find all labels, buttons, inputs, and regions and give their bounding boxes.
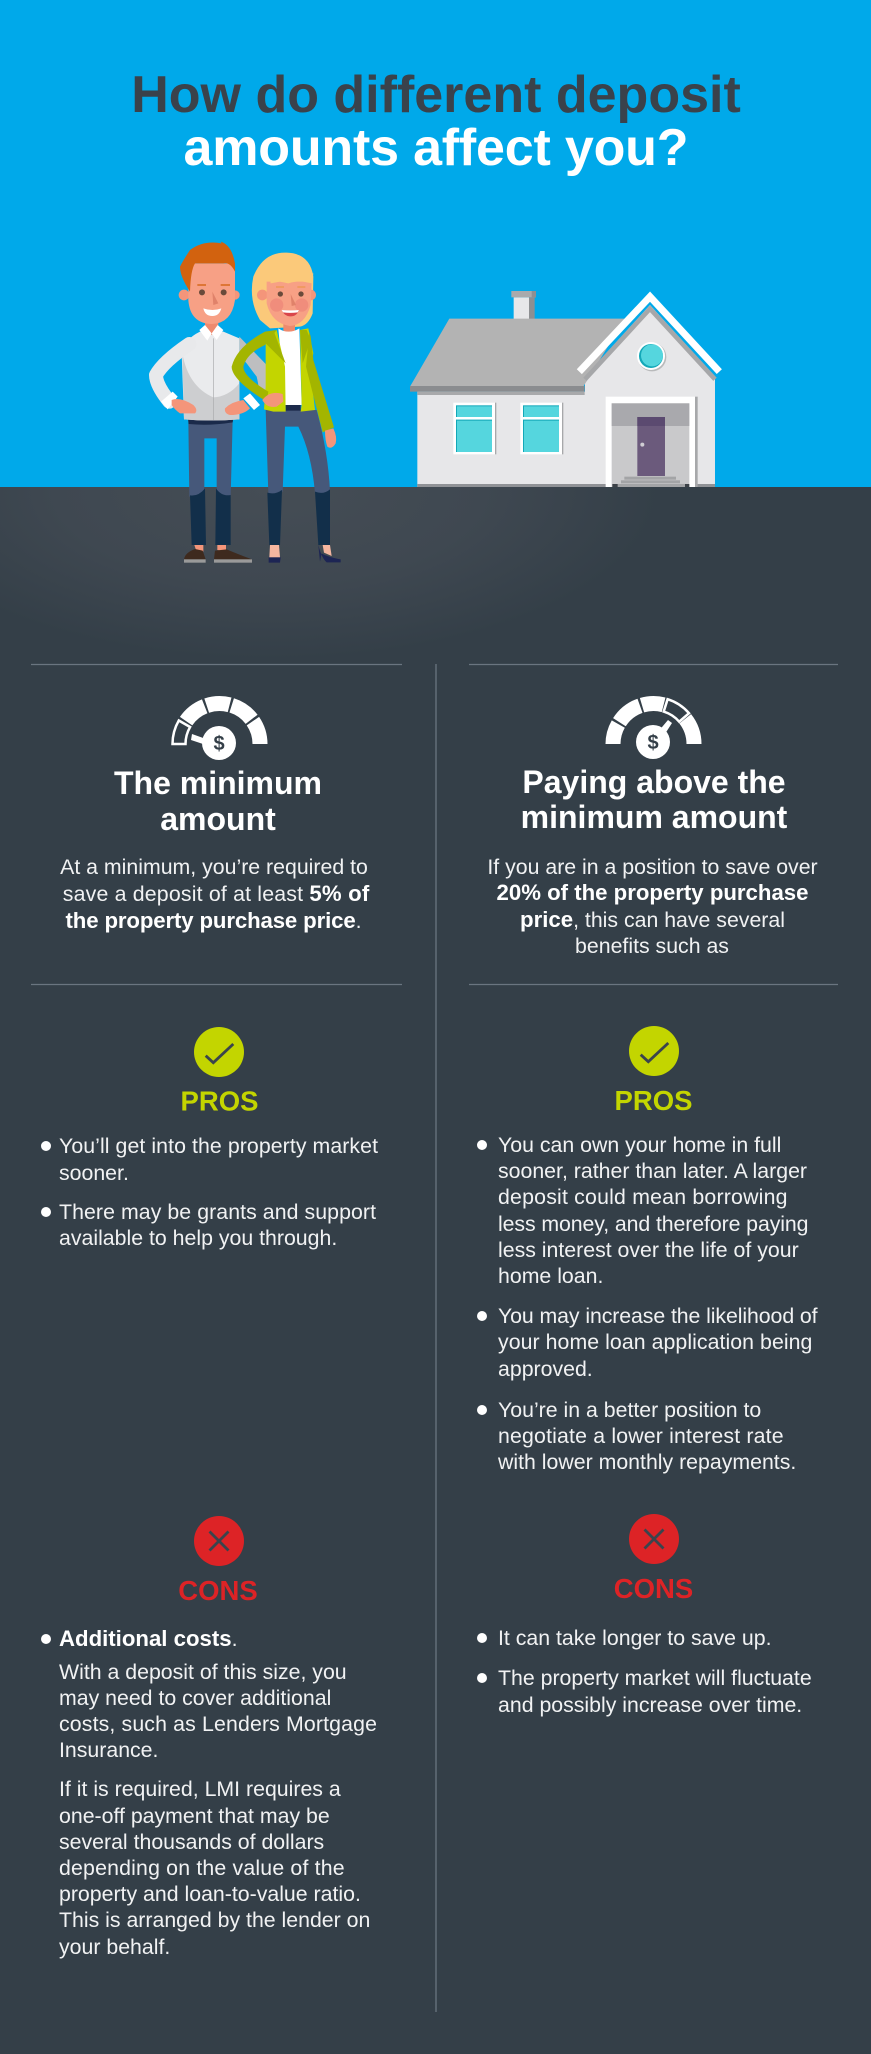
heading: The minimum (114, 765, 322, 801)
icon: pros tick (629, 1026, 679, 1076)
list: pros (477, 1133, 818, 1474)
text: intro: benefits such as (575, 934, 729, 958)
list: pros: You may increase the likelihood of (498, 1304, 818, 1328)
list: pros (41, 1134, 378, 1250)
heading (521, 764, 788, 835)
heading: Paying above the (522, 764, 786, 800)
text: intro: save a deposit of at least 5% of (63, 881, 370, 906)
icon: cons cross (629, 1514, 679, 1564)
text: intro: If you are in a position to save over (487, 855, 818, 879)
heading: amount (160, 801, 276, 837)
list: cons: It can take longer to save up. (498, 1626, 771, 1650)
list: cons: This is arranged by the lender on (59, 1908, 370, 1932)
heading: minimum amount (521, 799, 788, 835)
list: cons: may need to cover additional (59, 1686, 331, 1710)
list: pros: deposit could mean borrowing (498, 1185, 788, 1209)
list: pros: less interest over the life of your (498, 1238, 799, 1262)
list: cons: one-off payment that may be (59, 1804, 330, 1828)
list: pros: less money, and therefore paying (498, 1212, 808, 1236)
list: cons: The property market will fluctuate (498, 1666, 812, 1690)
list: pros: You can own your home in full (498, 1133, 781, 1157)
list: pros: sooner, rather than later. A larger (498, 1159, 807, 1183)
illustration: house (410, 291, 719, 487)
background: ground (0, 487, 871, 2054)
heading: cons: CONS (614, 1573, 693, 1604)
icon: gauge high: $ (647, 732, 659, 754)
list: cons: costs, such as Lenders Mortgage (59, 1712, 377, 1736)
text: intro: price, this can have several (520, 907, 785, 932)
list: pros: available to help you through. (59, 1226, 337, 1250)
dividers (31, 664, 838, 2012)
man (156, 242, 272, 563)
title (131, 66, 741, 177)
title: How do different deposit (131, 66, 741, 124)
icon: pros tick (194, 1027, 244, 1077)
panel: the minimum amount (41, 704, 378, 1959)
list: cons: your behalf. (59, 1935, 170, 1959)
list: cons: With a deposit of this size, you (59, 1660, 347, 1684)
list: cons: Additional costs. (59, 1626, 238, 1651)
list: cons: Insurance. (59, 1738, 158, 1762)
text: intro: the property purchase price. (66, 908, 362, 933)
woman (232, 253, 341, 563)
icon: cons cross (194, 1516, 244, 1566)
text: intro (60, 855, 370, 933)
text: intro (487, 855, 818, 958)
list: cons: depending on the value of the (59, 1856, 345, 1880)
list: pros: You’re in a better position to (498, 1398, 761, 1422)
heading: pros: PROS (615, 1085, 692, 1116)
heading: cons: CONS (178, 1575, 258, 1606)
list: cons: property and loan-to-value ratio. (59, 1882, 361, 1906)
text: intro: At a minimum, you’re required to (60, 855, 368, 879)
list: cons (477, 1626, 812, 1717)
text: intro: 20% of the property purchase (497, 880, 808, 905)
list: pros: your home loan application being (498, 1330, 812, 1354)
list: pros: negotiate a lower interest rate (498, 1424, 784, 1448)
heading: pros: PROS (181, 1086, 258, 1116)
list: pros: home loan. (498, 1264, 603, 1288)
background: sky (0, 0, 871, 488)
list: cons (41, 1626, 377, 1959)
icon: gauge low: $ (213, 733, 225, 755)
panel: paying above the minimum amount (477, 699, 818, 1717)
list: cons: and possibly increase over time. (498, 1693, 802, 1717)
title: amounts affect you? (184, 119, 688, 177)
list: pros: approved. (498, 1357, 593, 1381)
list: pros: sooner. (59, 1161, 129, 1185)
ground glow (0, 487, 871, 677)
list: cons: several thousands of dollars (59, 1830, 324, 1854)
icon: gauge low (172, 704, 260, 760)
heading (114, 765, 322, 837)
list: pros: You’ll get into the property market (59, 1134, 378, 1158)
list: pros: with lower monthly repayments. (497, 1450, 796, 1474)
list: cons: If it is required, LMI requires a (59, 1777, 341, 1801)
list: pros: There may be grants and support (59, 1200, 376, 1224)
icon: gauge high (613, 699, 694, 759)
illustration: couple (156, 242, 341, 563)
